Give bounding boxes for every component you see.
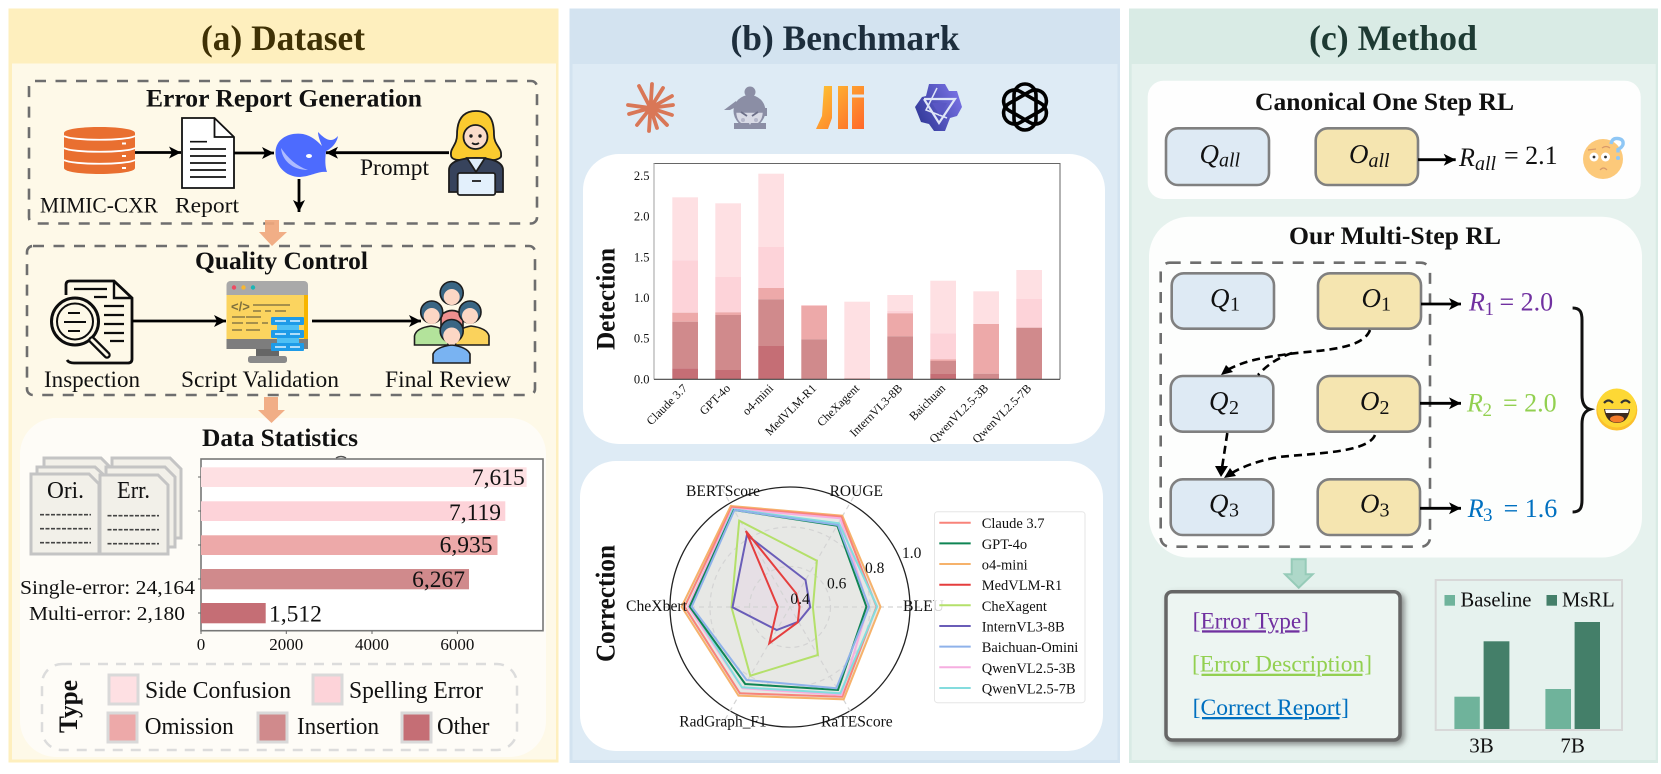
label: report: Report [175, 193, 239, 218]
stacked bar chart: detection: CheXagent [814, 381, 863, 429]
panel: canonical one step [1148, 81, 1641, 199]
bar chart: error types: 4000 [355, 635, 389, 654]
panel: data statistics [20, 418, 546, 757]
heading: canonical one step: Canonical One Step RL [1255, 89, 1514, 116]
label: Q2: 2 [1229, 397, 1239, 419]
label: reward 3: = 1.6 [1504, 494, 1557, 523]
legend: error type: Side Confusion [145, 678, 291, 704]
label: original: Ori. [47, 478, 84, 504]
icon: inspection [52, 281, 132, 363]
stacked bar chart: detection: MedVLM-R1 [762, 381, 819, 438]
arrow: O3 to R3 [1420, 507, 1461, 510]
bar chart: error types: 6,267 [412, 567, 465, 593]
icon: openai knot [1000, 84, 1050, 130]
radar chart: correction: 0.8 [865, 560, 885, 577]
radar chart: correction: BERTScore [686, 483, 760, 500]
stacked bar chart: detection: QwenVL2.5-3B [926, 381, 991, 446]
icon: confused face [1583, 138, 1623, 179]
label: MIMIC-CXR: MIMIC-CXR [40, 193, 158, 218]
label: reward all: = 2.1 [1504, 141, 1558, 170]
icon: sage figure [724, 86, 767, 129]
box: Q2 [1171, 376, 1273, 432]
label: O2: 2 [1380, 397, 1390, 419]
stacked bar chart: detection: 0.5 [634, 332, 650, 346]
bar chart: baseline vs MsRL: MsRL [1562, 590, 1615, 612]
panel: correction chart [580, 461, 1103, 751]
panel: multi-step [1149, 217, 1642, 557]
arrow: O2 to R2 [1420, 402, 1461, 405]
stacked bar chart: detection: 0.0 [634, 372, 650, 386]
label: query all: all [1219, 150, 1241, 172]
bar chart: baseline vs MsRL [1436, 580, 1622, 758]
heading: dataset: (a) Dataset [201, 18, 365, 58]
stat: single-error count: Single-error: 24,164 [20, 577, 195, 599]
label: reward 2: 2 [1482, 400, 1492, 421]
label: inspection: Inspection [44, 367, 140, 392]
panel: method [1129, 8, 1658, 763]
arrow: generation to quality control [259, 220, 287, 246]
label: prompt: Prompt [360, 155, 429, 181]
arrow: inspection to validation [132, 320, 226, 322]
radar chart: correction: 0.4 [790, 591, 810, 608]
bar chart: error types: 7,119 [449, 500, 501, 526]
arrow: quality control to statistics [258, 397, 285, 423]
icon: orange logo [816, 86, 864, 129]
label: reward 2: = 2.0 [1503, 389, 1557, 418]
box: O3 [1318, 479, 1420, 535]
icon: script validation screen: </> [231, 299, 250, 314]
stacked bar chart: detection: Claude 3.7 [643, 381, 690, 428]
heading: error report generation: Error Report Generation [146, 86, 422, 113]
stat: multi-error count: Multi-error: 2,180 [29, 603, 185, 625]
legend: models: CheXagent [982, 599, 1047, 615]
icon: whale model [275, 132, 338, 177]
box: output all [1316, 128, 1418, 185]
legend: models: GPT-4o [982, 537, 1027, 553]
radar chart: correction: RadGraph_F1 [679, 714, 767, 731]
heading: method: (c) Method [1309, 18, 1477, 58]
stacked bar chart: detection: o4-mini [739, 381, 777, 418]
box: O1 [1318, 273, 1421, 329]
label: O1: 1 [1381, 294, 1391, 316]
bar chart: error types: 6,935 [440, 533, 492, 559]
label: output all: all [1368, 150, 1390, 172]
icon: qwen logo [915, 84, 962, 131]
legend: models: o4-mini [982, 558, 1028, 574]
output line: error type: [Error Type] [1193, 608, 1309, 633]
panel: quality control [27, 246, 535, 395]
bar chart: error types: 2000 [269, 635, 303, 654]
label: reward 1: R [1468, 288, 1485, 317]
heading: data statistics: Data Statistics [202, 425, 358, 452]
dashed group: steps [1161, 263, 1430, 547]
legend: models: QwenVL2.5-3B [982, 661, 1076, 677]
stacked bar chart: detection: GPT-4o [697, 381, 733, 418]
stacked bar chart: detection: 1.0 [634, 291, 650, 305]
icon: happy face [1596, 388, 1637, 430]
icon: review team [414, 282, 489, 363]
icon: claude star [628, 84, 673, 131]
legend: error type: Insertion [297, 714, 379, 740]
label: O3: O [1360, 489, 1380, 519]
label: O3: 3 [1380, 500, 1390, 522]
axis title: correction: Correction [590, 545, 621, 662]
label: O1: O [1362, 283, 1381, 313]
panel: error report generation [29, 81, 537, 224]
bar chart: baseline vs MsRL: 3B [1469, 734, 1494, 758]
arrow: model output [298, 179, 300, 212]
bar chart: baseline vs MsRL: 7B [1560, 734, 1585, 758]
label: Q1: 1 [1230, 294, 1240, 316]
label: Q1: Q [1210, 283, 1230, 313]
arrows: dashed feedback [1215, 330, 1375, 478]
arrow: output to reward [1418, 158, 1456, 161]
stacked bar chart: detection: 1.5 [634, 250, 650, 264]
radar chart: correction: BLEU [903, 598, 944, 615]
bar chart: error types: 1,512 [269, 602, 322, 628]
box: query all [1166, 128, 1269, 185]
label: reward 1: 1 [1484, 299, 1494, 320]
radar chart: correction: CheXbert [626, 598, 688, 615]
radar chart: correction [626, 483, 944, 731]
icon: report document [182, 118, 234, 188]
bar chart: error types: 0 [197, 635, 205, 654]
panel: dataset [8, 8, 558, 762]
label: reward 2: R [1466, 389, 1483, 418]
label: erroneous: Err. [117, 478, 150, 504]
legend: models: MedVLM-R1 [982, 578, 1062, 594]
arrow: multi-step to output [1285, 559, 1313, 588]
stacked bar chart: detection: Baichuan [906, 381, 948, 423]
icon: database [64, 127, 135, 174]
label: reward 3: R [1467, 494, 1484, 523]
arrow: validation to final review [312, 320, 421, 322]
label: reward all: all [1475, 153, 1497, 175]
legend: models: InternVL3-8B [982, 620, 1065, 636]
panel: benchmark [570, 8, 1120, 763]
legend: error type [42, 664, 517, 750]
label: query all: Q [1200, 139, 1219, 169]
output line: correct report: [Correct Report] [1193, 695, 1349, 720]
arrow: prompt to model [326, 151, 449, 154]
heading: quality control: Quality Control [195, 248, 368, 275]
legend: models: Baichuan-Omini [982, 640, 1078, 656]
arrow: database to report [135, 151, 181, 154]
legend: error type: Spelling Error [349, 678, 483, 704]
label: reward 1: = 2.0 [1500, 288, 1553, 317]
heading: benchmark: (b) Benchmark [730, 18, 960, 58]
heading: multi-step: Our Multi-Step RL [1289, 223, 1501, 250]
legend title: type: Type [54, 680, 83, 733]
radar chart: correction: 0.6 [827, 576, 847, 593]
label: final review: Final Review [385, 367, 511, 392]
bar chart: error types [197, 456, 543, 654]
legend: error type: Omission [145, 714, 234, 740]
label: script validation: Script Validation [181, 367, 340, 392]
label: output all: O [1349, 139, 1368, 169]
icon: document stacks [31, 458, 181, 554]
bar chart: error types: 7,615 [472, 465, 525, 491]
label: O2: O [1360, 386, 1380, 416]
stacked bar chart: detection: InternVL3-8B [847, 381, 905, 440]
stacked bar chart: detection: QwenVL2.5-7B [969, 381, 1034, 446]
stacked bar chart: detection [634, 164, 1060, 446]
box: Q3 [1171, 479, 1273, 535]
brace: rewards [1573, 308, 1590, 512]
box: Q1 [1172, 273, 1274, 329]
radar chart: correction: RaTEScore [821, 714, 893, 731]
box: O2 [1318, 376, 1420, 432]
bar chart: baseline vs MsRL: Baseline [1460, 590, 1531, 612]
icon: person with laptop [449, 111, 503, 195]
arrow: O1 to R1 [1421, 303, 1461, 305]
legend: models [934, 512, 1085, 703]
legend: models: Claude 3.7 [982, 516, 1045, 532]
box: structured output [1166, 592, 1400, 740]
bar chart: error types: 6000 [440, 635, 474, 654]
output line: error description: [Error Description] [1192, 652, 1372, 677]
legend: models: QwenVL2.5-7B [982, 682, 1076, 698]
radar chart: correction: ROUGE [830, 483, 883, 500]
label: reward 3: 3 [1483, 505, 1492, 526]
label: Q3: 3 [1229, 500, 1239, 522]
label: Q2: Q [1209, 386, 1228, 416]
legend: error type: Other [437, 714, 490, 740]
stacked bar chart: detection: 2.5 [634, 169, 650, 183]
stacked bar chart: detection: 2.0 [634, 210, 650, 224]
label: Q3: Q [1209, 489, 1228, 519]
arrow: report to model [234, 152, 274, 154]
radar chart: correction: 1.0 [902, 545, 922, 562]
icon: script validation screen [226, 281, 308, 363]
label: reward all: R [1458, 143, 1475, 172]
panel: detection chart [583, 154, 1105, 446]
axis title: detection: Detection [591, 248, 621, 350]
